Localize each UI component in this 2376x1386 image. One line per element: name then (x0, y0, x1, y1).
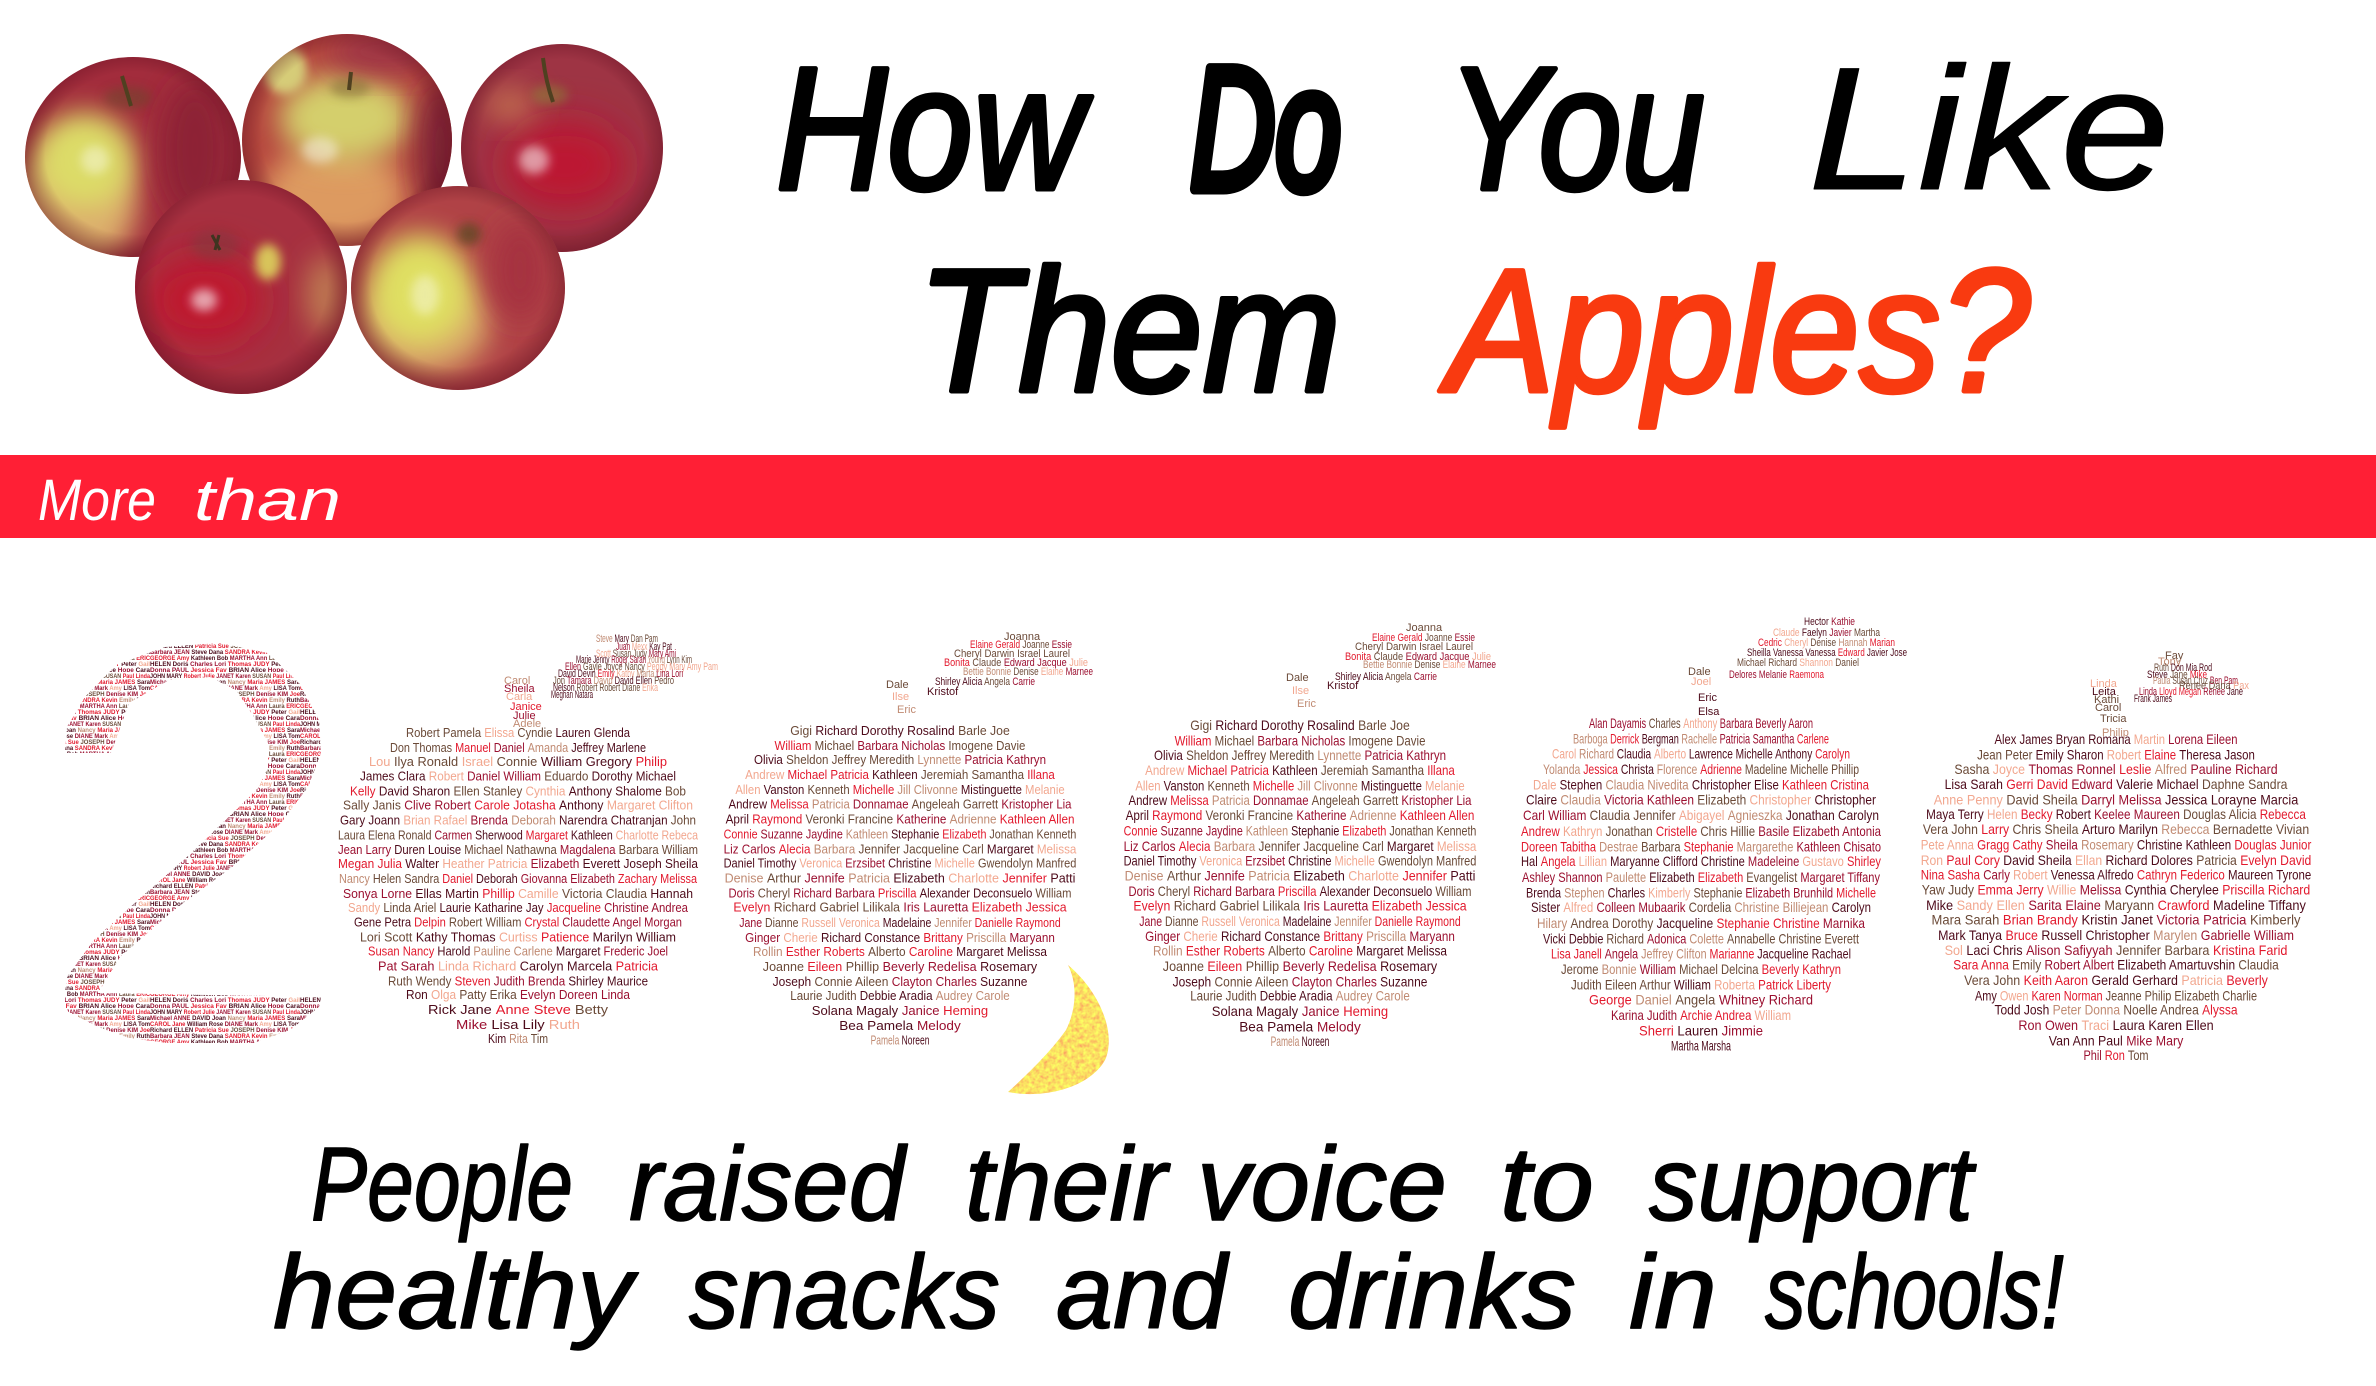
cloud 5 body: Mark Tanya Bruce Russell Christopher Marylen Gabrielle William (1938, 929, 2294, 944)
cloud 3 body: Bea Pamela Melody (1239, 1020, 1361, 1034)
cloud 1 stem: Julie (513, 710, 536, 722)
cloud 2 body: Laurie Judith Debbie Aradia Audrey Carole (790, 988, 1010, 1003)
cloud 2 leaf: Bettie Bonnie Denise Elaine Marnee (963, 666, 1093, 678)
cloud 3 leaf: Kristof (1327, 680, 1359, 692)
cloud 2 leaf: Bonita Claude Edward Jacque Julie (944, 657, 1088, 669)
bottom text line 2: and (1056, 1234, 1231, 1351)
cloud 2 body: Pamela Noreen (871, 1033, 929, 1047)
cloud 1 body: Rick Jane Anne Steve Betty (428, 1003, 608, 1017)
cloud 1 body: Susan Nancy Harold Pauline Carlene Margaret Frederic Joel (368, 944, 668, 958)
cloud 1 body: Sonya Lorne Ellas Martin Phillip Camille Victoria Claudia Hannah (343, 886, 693, 901)
cloud 5 stem: Tricia (2100, 713, 2127, 725)
cloud 1 leaf: Ellen Gayle Joyce Nancy Peggy Mary Amy Pam (565, 661, 718, 673)
cloud 4 body: Carl William Claudia Jennifer Abigayel Agnieszka Jonathan Carolyn (1523, 807, 1879, 823)
cloud 2 stem (886, 679, 916, 716)
cloud 1 leaf: Jon Tamara David David Ellen Pedro (553, 675, 674, 687)
cloud 4 body: Carol Richard Claudia Alberto Lawrence Michelle Anthony Carolyn (1552, 746, 1850, 761)
cloud 5 leaf: Linda Lloyd Megan Renee Jane (2139, 686, 2243, 698)
cloud 4 body: Hilary Andrea Dorothy Jacqueline Stephanie Christine Marnika (1537, 915, 1865, 931)
banner text: More than: More (38, 468, 156, 533)
cloud 4 body: Brenda Stephen Charles Kimberly Stephanie Elizabeth Brunhild Michelle (1526, 885, 1876, 901)
cloud 5 body: Amy Owen Karen Norman Jeanne Philip Elizabeth Charlie (1975, 989, 2257, 1004)
cloud 2 leaf: Kristof (927, 686, 959, 698)
cloud 4 body: Barboga Derrick Bergman Rachelle Patricia Samantha Carlene (1573, 731, 1829, 747)
cloud 5 body (1921, 733, 2311, 1064)
cloud 1 body: Mike Lisa Lily Ruth (456, 1017, 580, 1032)
cloud 2 body: Rollin Esther Roberts Alberto Caroline Margaret Melissa (753, 944, 1047, 959)
cloud 5 body: Yaw Judy Emma Jerry Willie Melissa Cynthia Cherylee Priscilla Richard (1922, 883, 2310, 898)
cloud 3 leaf: Shirley Alicia Angela Carrie (1335, 671, 1437, 683)
cloud 4 body: George Daniel Angela Whitney Richard (1589, 991, 1813, 1007)
cloud 5 leaf (2134, 650, 2249, 705)
cloud 1 leaf: Nelson Robert Robert Diane Erika (553, 682, 659, 694)
cloud 4 body: Yolanda Jessica Christa Florence Adrienne Madeline Michelle Phillip (1543, 761, 1859, 777)
cloud 3 leaf: Joanna (1406, 622, 1443, 634)
cloud 3 body: Ginger Cherie Richard Constance Brittany Priscilla Maryann (1145, 929, 1455, 944)
bottom text line 1: voice (1197, 1126, 1447, 1243)
cloud 5 body: Jean Peter Emily Sharon Robert Elaine Theresa Jason (1977, 748, 2255, 763)
cloud 3 body: Gigi Richard Dorothy Rosalind Barle Joe (1190, 718, 1410, 733)
cloud 1 body: Ruth Wendy Steven Judith Brenda Shirley Maurice (388, 974, 648, 988)
apple word cloud 2 (724, 631, 1093, 1047)
cloud 1 body: Lori Scott Kathy Thomas Curtiss Patience Marilyn William (360, 930, 676, 944)
cloud 1 body: Ron Olga Patty Erika Evelyn Doreen Linda (406, 988, 630, 1002)
cloud 3 body: Solana Magaly Janice Heming (1212, 1004, 1388, 1019)
cloud 3 body: Denise Arthur Jennife Patricia Elizabeth Charlotte Jennifer Patti (1125, 869, 1475, 884)
cloud 4 body: Martha Marsha (1671, 1038, 1731, 1053)
cloud 1 leaf: Marie Jenny Roger Sarah Young Lynn Kim (576, 654, 692, 666)
bottom text line 2: in (1629, 1234, 1717, 1351)
cloud 4 body: Alan Dayamis Charles Anthony Barbara Beverly Aaron (1589, 715, 1813, 731)
cloud 3 stem: Eric (1297, 698, 1316, 710)
bottom text line 2: drinks (1288, 1234, 1576, 1351)
cloud 5 body: Sol Laci Chris Alison Safiyyah Jennifer Barbara Kristina Farid (1945, 944, 2287, 959)
cloud 3 body: Laurie Judith Debbie Aradia Audrey Carole (1190, 989, 1410, 1004)
cloud 4 stem (1688, 666, 1720, 718)
title line 1 (776, 32, 2170, 227)
cloud 4 body: Lisa Janell Angela Jeffrey Clifton Marianne Jacqueline Rachael (1551, 945, 1851, 961)
cloud 3 body: Allen Vanston Kenneth Michelle Jill Clivonne Mistinguette Melanie (1135, 779, 1465, 793)
cloud 4 leaf: Michael Richard Shannon Daniel (1737, 657, 1859, 669)
cloud 3 leaf (1327, 622, 1496, 692)
cloud 2 body: April Raymond Veronki Francine Katherine Adrienne Kathleen Allen (726, 812, 1074, 826)
cloud 2 body: Jane Dianne Russell Veronica Madelaine Jennifer Danielle Raymond (739, 915, 1061, 930)
cloud 2 body: Allen Vanston Kenneth Michelle Jill Clivonne Mistinguette Melanie (735, 782, 1065, 797)
cloud 4 body (1521, 715, 1881, 1053)
cloud 1 body: Laura Elena Ronald Carmen Sherwood Margaret Kathleen Charlotte Rebeca (338, 828, 698, 842)
apple: back right (455, 40, 670, 255)
bottom text line 2 (273, 1234, 2064, 1351)
cloud 1 body: Kim Rita Tim (488, 1031, 548, 1046)
cloud 2 body: Gigi Richard Dorothy Rosalind Barle Joe (790, 723, 1010, 738)
cloud 2 stem: Ilse (892, 691, 909, 703)
cloud 1 stem: Carla (506, 691, 533, 703)
cloud 2 body: Olivia Sheldon Jeffrey Meredith Lynnette Patricia Kathryn (754, 752, 1046, 767)
cloud 2 body: Ginger Cherie Richard Constance Brittany Priscilla Maryann (745, 930, 1055, 945)
apple: front right (348, 184, 570, 392)
bottom text line 1: to (1500, 1126, 1594, 1243)
cloud 2 body: Evelyn Richard Gabriel Lilikala Iris Lauretta Elizabeth Jessica (733, 900, 1067, 915)
cloud 5 stem: Carol (2095, 702, 2121, 714)
cloud 5 body: Sasha Joyce Thomas Ronnel Leslie Alfred Pauline Richard (1954, 763, 2278, 778)
title line 2: Them (917, 234, 1341, 429)
banner text: More than (38, 468, 341, 533)
cloud 5 body: Maya Terry Helen Becky Robert Keelee Maureen Douglas Alicia Rebecca (1926, 808, 2306, 823)
cloud 4 leaf: Hector Kathie (1804, 616, 1855, 628)
apple word cloud 4 (1521, 616, 1907, 1053)
cloud 5 body: Nina Sasha Carly Robert Venessa Alfredo Cathryn Federico Maureen Tyrone (1921, 868, 2311, 883)
cloud 1 leaf: Steve Mary Dan Pam (596, 633, 658, 645)
digit 2 made of names (65, 643, 321, 1043)
cloud 5 body: Todd Josh Peter Donna Noelle Andrea Alyssa (1994, 1003, 2238, 1018)
cloud 1 body: Lou Ilya Ronald Israel Connie William Gregory Philip (369, 754, 667, 769)
cloud 4 leaf: Delores Melanie Raemona (1729, 669, 1825, 681)
cloud 5 stem: Philip (2102, 727, 2129, 739)
cloud 3 body: Doris Cheryl Richard Barbara Priscilla Alexander Deconsuelo William (1128, 884, 1472, 899)
cloud 3 body: Rollin Esther Roberts Alberto Caroline Margaret Melissa (1153, 944, 1447, 959)
cloud 3 leaf: Elaine Gerald Joanne Essie (1372, 632, 1475, 644)
cloud 5 leaf: Steve Jane Mike (2147, 669, 2207, 681)
banana (1008, 965, 1109, 1094)
cloud 5 body: Vera John Keith Aaron Gerald Gerhard Patricia Beverly (1964, 974, 2269, 989)
cloud 4 leaf: Claude Faelyn Javier Martha (1773, 627, 1881, 639)
cloud 4 body: Vicki Debbie Richard Adonica Colette Annabelle Christine Everett (1543, 931, 1859, 947)
title line 2: Apples? (1439, 234, 2030, 429)
red banner (0, 455, 2376, 538)
cloud 3 body: Daniel Timothy Veronica Erzsibet Christine Michelle Gwendolyn Manfred (1124, 853, 1476, 868)
cloud 3 body: William Michael Barbara Nicholas Imogene Davie (1175, 733, 1425, 748)
cloud 4 body: Jerome Bonnie William Michael Delcina Beverly Kathryn (1561, 961, 1841, 977)
bottom text line 1: their (965, 1126, 1171, 1243)
cloud 5 leaf: Paula Susan Cruz Ben Pam (2153, 675, 2238, 687)
cloud 3 body: Olivia Sheldon Jeffrey Meredith Lynnette Patricia Kathryn (1154, 748, 1446, 763)
apple word cloud 1 (338, 633, 718, 1046)
cloud 2 body: Doris Cheryl Richard Barbara Priscilla Alexander Deconsuelo William (728, 886, 1072, 901)
cloud 5 body: Mara Sarah Brian Brandy Kristin Janet Victoria Patricia Kimberly (1932, 913, 2301, 928)
cloud 1 body: Pat Sarah Linda Richard Carolyn Marcela Patricia (378, 959, 658, 973)
cloud 3 body: Connie Suzanne Jaydine Kathleen Stephanie Elizabeth Jonathan Kenneth (1124, 824, 1476, 839)
title line 1: You (1447, 32, 1705, 227)
cloud 5 stem: Linda (2090, 678, 2118, 690)
cloud 3 stem: Ilse (1292, 685, 1309, 697)
cloud 4 leaf (1729, 616, 1907, 681)
cloud 4 leaf: Sheilla Vanessa Vanessa Edward Javier Jose (1747, 647, 1907, 659)
cloud 5 leaf: Ruth Don Mia Rod (2154, 662, 2212, 674)
cloud 3 leaf: Bonita Claude Edward Jacque Julie (1345, 651, 1491, 663)
cloud 5 body: Vera John Larry Chris Sheila Arturo Marilyn Rebecca Bernadette Vivian (1923, 823, 2309, 838)
cloud 3 stem (1286, 672, 1316, 710)
apple: front left (130, 178, 352, 396)
cloud 1 stem: Carol (504, 675, 530, 687)
cloud 3 body: Evelyn Richard Gabriel Lilikala Iris Lauretta Elizabeth Jessica (1133, 899, 1467, 913)
cloud 2 leaf: Joanna (1004, 631, 1041, 643)
cloud 5 body: Alex James Bryan Romana Martin Lorena Eileen (1994, 733, 2238, 748)
title line 1: Like (1808, 32, 2170, 227)
cloud 5 body: Phil Ron Tom (2083, 1049, 2149, 1064)
title line 1: How (776, 32, 1092, 227)
cloud 3 leaf: Cheryl Darwin Israel Laurel (1355, 641, 1473, 653)
cloud 2 stem: Dale (886, 679, 909, 691)
apple word cloud 3 (1124, 622, 1496, 1049)
title line 1: Do (1190, 32, 1341, 227)
cloud 1 leaf: Scott Susan Judy Mary Ami (596, 648, 676, 660)
cloud 1 body: Gene Petra Delpin Robert William Crystal Claudette Angel Morgan (354, 915, 682, 930)
bottom text line 2: snacks (689, 1234, 1000, 1351)
cloud 5 leaf: Fay (2165, 650, 2184, 662)
cloud 2 body: William Michael Barbara Nicholas Imogene Davie (775, 738, 1025, 753)
cloud 5 stem: Kathi (2094, 694, 2119, 706)
cloud 2 body: Joseph Connie Aileen Clayton Charles Suzanne (773, 974, 1027, 989)
bottom text line 1: support (1649, 1126, 1977, 1243)
apple word cloud 5 (1921, 650, 2311, 1064)
cloud 2 body: Andrew Melissa Patricia Donnamae Angeleah Garrett Kristopher Lia (728, 797, 1072, 811)
cloud 2 body: Bea Pamela Melody (839, 1018, 961, 1033)
cloud 4 body: Claire Claudia Victoria Kathleen Elizabeth Christopher Christopher (1526, 792, 1876, 807)
cloud 5 body: Ron Owen Traci Laura Karen Ellen (2018, 1019, 2214, 1034)
cloud 5 leaf: Tony (2158, 656, 2182, 668)
cloud 4 stem: Dale (1688, 666, 1711, 678)
cloud 5 body: Mike Sandy Ellen Sarita Elaine Maryann Crawford Madeline Tiffany (1926, 899, 2307, 914)
cloud 5 body: Sara Anna Emily Robert Albert Elizabeth Amartuvshin Claudia (1953, 958, 2279, 973)
cloud 2 body: Joanne Eileen Phillip Beverly Redelisa Rosemary (763, 959, 1037, 974)
cloud 2 body: Andrew Michael Patricia Kathleen Jeremiah Samantha Illana (745, 767, 1055, 782)
cloud 2 body: Denise Arthur Jennife Patricia Elizabeth Charlotte Jennifer Patti (725, 871, 1075, 886)
cloud 3 body: Jane Dianne Russell Veronica Madelaine Jennifer Danielle Raymond (1139, 914, 1461, 929)
cloud 2 body: Connie Suzanne Jaydine Kathleen Stephanie Elizabeth Jonathan Kenneth (724, 827, 1076, 841)
cloud 4 stem: Eric (1698, 692, 1717, 704)
cloud 1 body: Kelly David Sharon Ellen Stanley Cynthia Anthony Shalome Bob (350, 784, 686, 798)
bottom text line 1: People (311, 1126, 573, 1243)
cloud 3 body: April Raymond Veronki Francine Katherine Adrienne Kathleen Allen (1126, 808, 1474, 823)
banner text: More than: than (194, 468, 341, 533)
cloud 2 leaf: Shirley Alicia Angela Carrie (935, 676, 1035, 688)
cloud 2 body: Daniel Timothy Veronica Erzsibet Christine Michelle Gwendolyn Manfred (724, 856, 1076, 870)
cloud 5 body: Van Ann Paul Mike Mary (2049, 1034, 2184, 1049)
cloud 3 body: Joanne Eileen Phillip Beverly Redelisa Rosemary (1163, 959, 1437, 974)
cloud 4 body: Doreen Tabitha Destrae Barbara Stephanie Margarethe Kathleen Chisato (1521, 839, 1881, 854)
cloud 1 body: James Clara Robert Daniel William Eduardo Dorothy Michael (360, 769, 676, 784)
cloud 2 body: Liz Carlos Alecia Barbara Jennifer Jacqueline Carl Margaret Melissa (724, 842, 1077, 856)
cloud 5 body: Pete Anna Gragg Cathy Sheila Rosemary Christine Kathleen Douglas Junior (1921, 838, 2311, 853)
cloud 1 leaf (551, 633, 718, 701)
cloud 4 stem: Joel (1691, 676, 1711, 688)
cloud 1 body: Jean Larry Duren Louise Michael Nathawna Magdalena Barbara William (338, 843, 698, 857)
cloud 1 body (338, 725, 698, 1046)
cloud 4 leaf: Cedric Cheryl Denise Hannah Marian (1758, 637, 1895, 649)
cloud 3 body (1124, 718, 1477, 1049)
cloud 1 stem (504, 675, 542, 730)
cloud 3 body: Pamela Noreen (1271, 1034, 1329, 1049)
cloud 5 body: Anne Penny David Sheila Darryl Melissa Jessica Lorayne Marcia (1934, 793, 2298, 808)
cloud 3 body: Liz Carlos Alecia Barbara Jennifer Jacqueline Carl Margaret Melissa (1124, 839, 1477, 854)
cloud 5 leaf: Renee Dana Pax (2179, 680, 2249, 692)
cloud 4 body: Judith Eileen Arthur William Roberta Patrick Liberty (1571, 977, 1831, 993)
bottom text line 2: schools! (1765, 1234, 2064, 1351)
cloud 3 body: Andrew Michael Patricia Kathleen Jeremiah Samantha Illana (1145, 763, 1455, 778)
title line 2 (917, 234, 2030, 429)
cloud 4 body: Karina Judith Archie Andrea William (1611, 1007, 1791, 1023)
cloud 5 body: Ron Paul Cory David Sheila Ellan Richard Dolores Patricia Evelyn David (1921, 854, 2311, 869)
cloud 5 stem: Leita (2092, 686, 2117, 698)
cloud 1 body: Nancy Helen Sandra Daniel Deborah Giovanna Elizabeth Zachary Melissa (339, 871, 697, 886)
cloud 1 body: Gary Joann Brian Rafael Brenda Deborah Narendra Chatranjan John (340, 813, 696, 827)
cloud 1 leaf: Meghan Natara (551, 689, 593, 701)
bottom text line 2: healthy (273, 1234, 639, 1351)
cloud 1 stem: Janice (510, 701, 542, 713)
cloud 5 leaf: Frank James (2134, 693, 2172, 705)
bottom text line 1 (311, 1126, 1977, 1243)
cloud 4 body: Dale Stephen Claudia Nivedita Christopher Elise Kathleen Cristina (1533, 777, 1869, 793)
cloud 1 body: Don Thomas Manuel Daniel Amanda Jeffrey Marlene (390, 740, 646, 755)
apple photo group (13, 30, 670, 396)
apple: back left (25, 57, 241, 257)
cloud 1 stem: Sheila (504, 683, 535, 695)
cloud 4 body: Ashley Shannon Paulette Elizabeth Elizabeth Evangelist Margaret Tiffany (1522, 869, 1880, 885)
cloud 2 leaf: Cheryl Darwin Israel Laurel (954, 648, 1070, 660)
cloud 2 stem: Eric (897, 704, 916, 716)
cloud 1 stem: Adele (513, 718, 541, 730)
cloud 5 stem (2090, 678, 2129, 739)
cloud 1 leaf: Juan Mexx Kay Pat (616, 641, 672, 653)
cloud 2 leaf: Elaine Gerald Joanne Essie (970, 639, 1072, 651)
cloud 4 stem: Elsa (1698, 706, 1720, 718)
cloud 3 body: Joseph Connie Aileen Clayton Charles Suzanne (1173, 974, 1427, 989)
cloud 2 body (724, 723, 1077, 1047)
cloud 1 body: Megan Julia Walter Heather Patricia Elizabeth Everett Joseph Sheila (338, 857, 698, 871)
bottom text line 1: raised (629, 1126, 908, 1243)
cloud 2 leaf (927, 631, 1093, 698)
cloud 1 body: Sandy Linda Ariel Laurie Katharine Jay Jacqueline Christine Andrea (348, 900, 688, 915)
cloud 3 stem: Dale (1286, 672, 1309, 684)
cloud 5 body: Lisa Sarah Gerri David Edward Valerie Michael Daphne Sandra (1945, 778, 2287, 793)
cloud 4 body: Sister Alfred Colleen Mubaarik Cordelia Christine Billiejean Carolyn (1531, 899, 1871, 915)
cloud 1 body: Robert Pamela Elissa Cyndie Lauren Glenda (406, 725, 630, 740)
cloud 1 body: Sally Janis Clive Robert Carole Jotasha Anthony Margaret Clifton (343, 798, 693, 812)
cloud 3 body: Andrew Melissa Patricia Donnamae Angeleah Garrett Kristopher Lia (1128, 793, 1472, 808)
cloud 4 body: Hal Angela Lillian Maryanne Clifford Christine Madeleine Gustavo Shirley (1521, 853, 1881, 869)
cloud 3 leaf: Bettie Bonnie Denise Elaine Marnee (1363, 659, 1496, 671)
apple: back middle (240, 30, 462, 250)
cloud 4 body: Sherri Lauren Jimmie (1639, 1023, 1763, 1039)
cloud 1 leaf: David Devin Emily Kathy Marta Lina Lori (558, 668, 683, 680)
cloud 2 body: Solana Magaly Janice Heming (812, 1003, 988, 1018)
cloud 4 body: Andrew Kathryn Jonathan Cristelle Chris Hillie Basile Elizabeth Antonia (1521, 823, 1881, 839)
